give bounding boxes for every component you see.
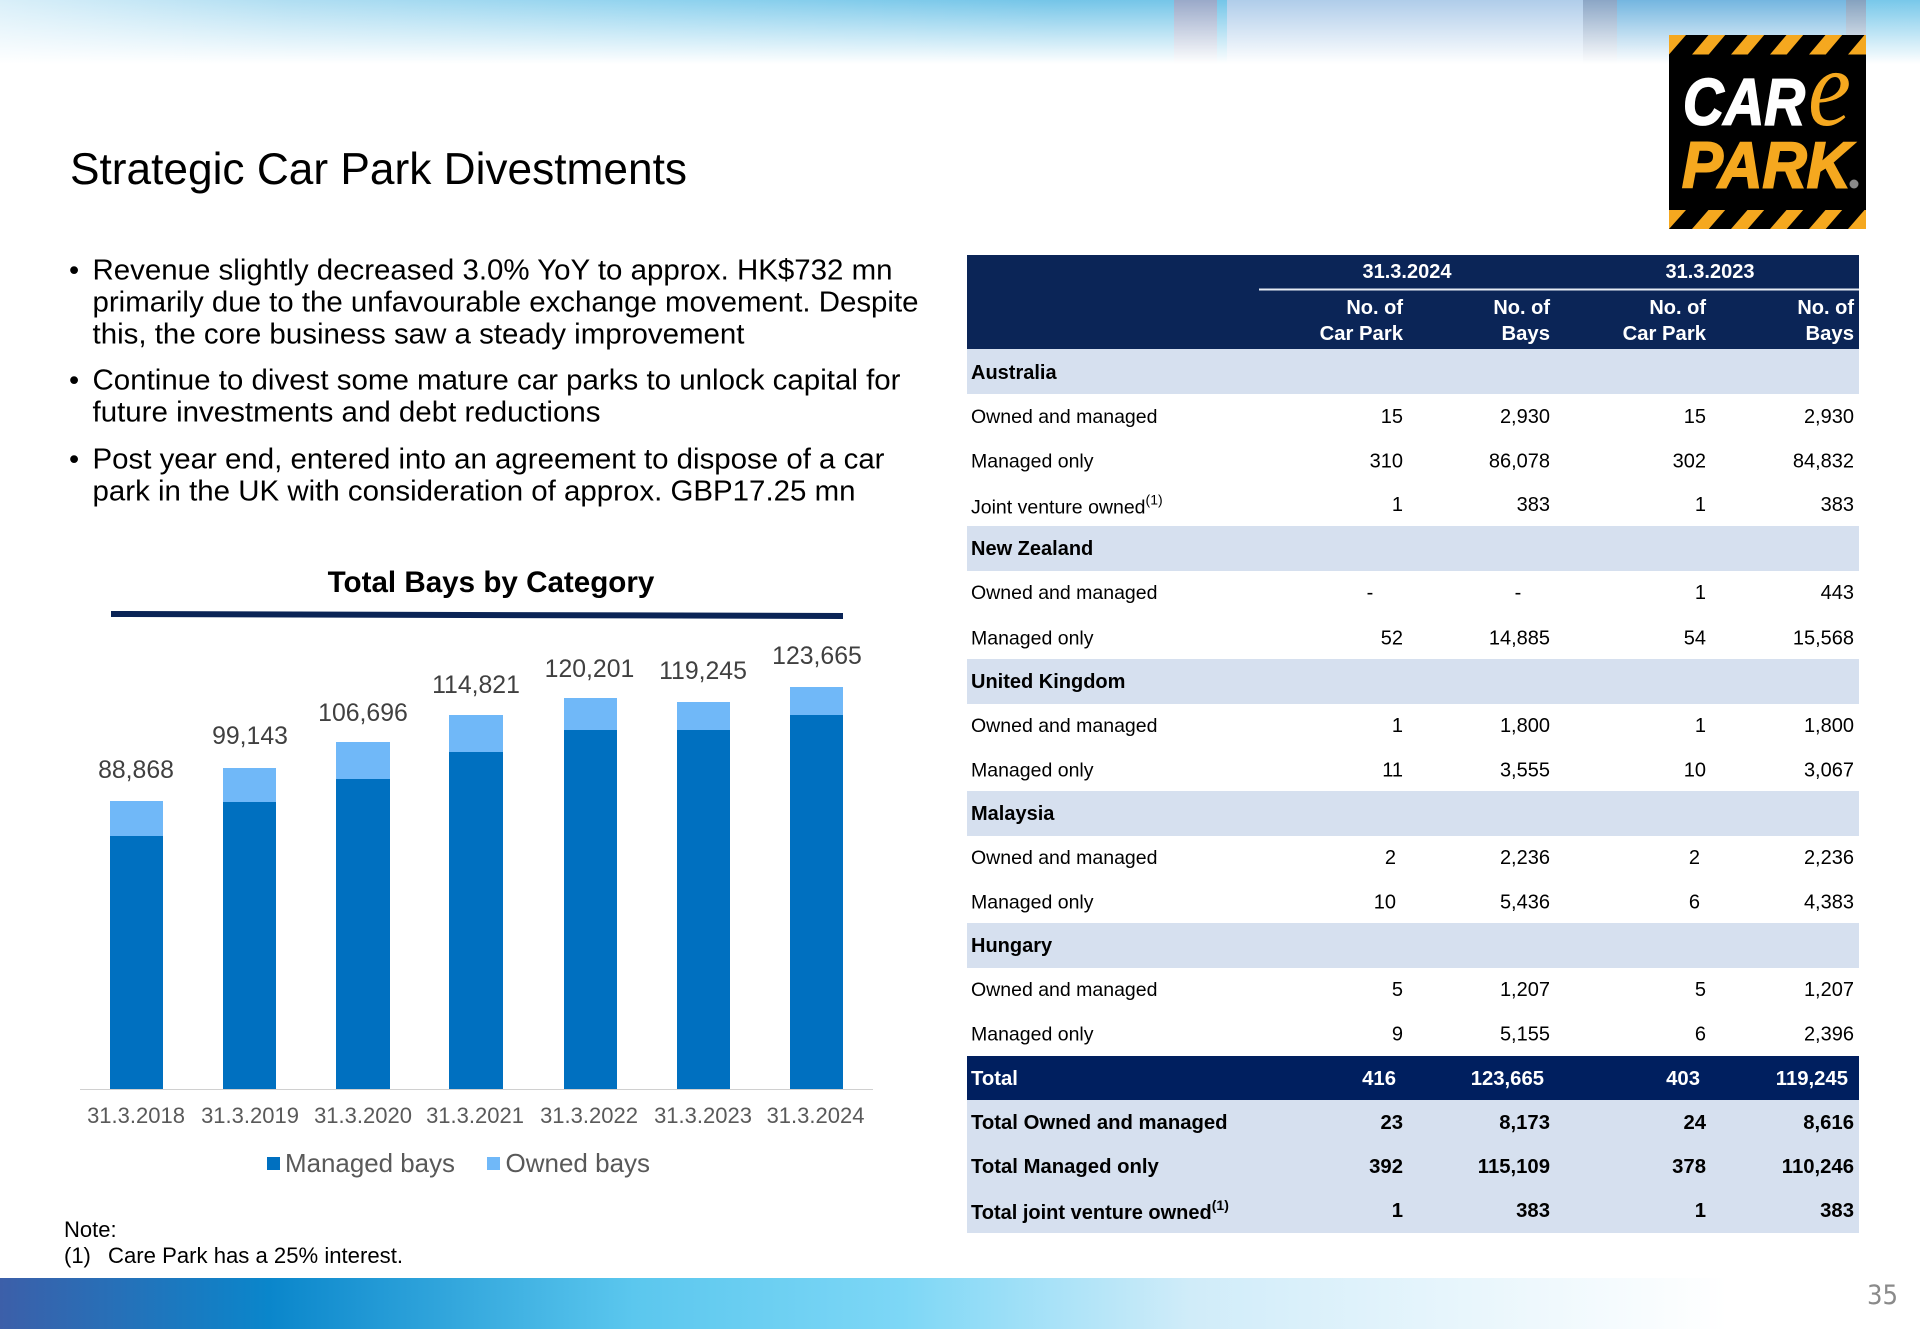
row: UK managed only: 3,067 bbox=[1804, 760, 1854, 782]
summary: total joint venture owned: (1) bbox=[1212, 1197, 1229, 1213]
row: UK owned and managed: 1,800 bbox=[1804, 715, 1854, 737]
section: Australia: Australia bbox=[971, 362, 1057, 384]
row: Australia owned and managed: Owned and managed bbox=[971, 406, 1157, 428]
row: UK owned and managed: 1,800 bbox=[1500, 715, 1550, 737]
summary: total joint venture owned: 1 bbox=[1392, 1200, 1403, 1222]
row: Australia joint venture: 1 bbox=[1695, 494, 1706, 516]
section: New Zealand: New Zealand bbox=[971, 538, 1093, 560]
row: New Zealand owned and managed: Owned and managed bbox=[971, 582, 1157, 604]
summary: total managed only: 110,246 bbox=[1782, 1156, 1854, 1178]
row: Hungary owned and managed: 5 bbox=[1695, 979, 1706, 1001]
row: Australia managed only: 302 bbox=[1673, 450, 1706, 472]
row: Malaysia owned and managed bbox=[971, 847, 1854, 869]
row: UK owned and managed: Owned and managed bbox=[971, 715, 1157, 737]
bar 31.3.2018: 88,868 bbox=[98, 757, 174, 784]
summary: total managed only: 392 bbox=[1369, 1156, 1403, 1178]
row: Hungary managed only: Managed only bbox=[971, 1024, 1094, 1046]
page number: 35 bbox=[1867, 1280, 1898, 1311]
row: New Zealand managed only: 52 bbox=[1381, 628, 1403, 650]
chart legend bbox=[267, 1148, 650, 1178]
table header: No. of bbox=[1797, 297, 1854, 319]
bullet 2: future investments and debt reductions bbox=[92, 396, 600, 428]
chart legend: Owned bays bbox=[506, 1148, 650, 1178]
bullet 2: Continue to divest some mature car parks to unlock capital for bbox=[92, 364, 901, 396]
table header bbox=[967, 255, 1859, 349]
row: Australia owned and managed bbox=[971, 406, 1854, 428]
bullet 2: • bbox=[69, 364, 79, 396]
row: Hungary owned and managed: 5 bbox=[1392, 979, 1403, 1001]
bar 31.3.2022: 120,201 bbox=[545, 656, 634, 683]
summary: total joint venture owned bbox=[971, 1197, 1854, 1224]
row: Australia managed only: 84,832 bbox=[1793, 450, 1854, 472]
bar 31.3.2019: 31.3.2019 bbox=[201, 1103, 299, 1128]
table header: 31.3.2024 bbox=[1363, 261, 1452, 283]
row: New Zealand owned and managed: 443 bbox=[1821, 582, 1854, 604]
row: Malaysia owned and managed: 2 bbox=[1385, 847, 1396, 869]
table header: Car Park bbox=[1623, 323, 1707, 345]
bar 31.3.2023 bbox=[654, 658, 752, 1128]
summary: total joint venture owned: Total joint venture owned bbox=[971, 1202, 1212, 1224]
row: Hungary owned and managed: 1,207 bbox=[1500, 979, 1550, 1001]
row: Australia joint venture: 383 bbox=[1821, 494, 1854, 516]
bullet 3: park in the UK with consideration of approx. GBP17.25 mn bbox=[92, 476, 856, 508]
bullet 1: • bbox=[69, 254, 79, 286]
bar 31.3.2021: 114,821 bbox=[432, 672, 520, 699]
total row: 119,245 bbox=[1776, 1068, 1848, 1090]
bar 31.3.2020: 31.3.2020 bbox=[314, 1103, 412, 1128]
section: Australia bbox=[967, 349, 1859, 394]
row: Malaysia owned and managed: 2 bbox=[1689, 847, 1700, 869]
row: New Zealand managed only bbox=[971, 628, 1854, 650]
bar 31.3.2018: 31.3.2018 bbox=[87, 1103, 185, 1128]
summary: total owned and managed: 24 bbox=[1683, 1112, 1707, 1134]
bullet 1: primarily due to the unfavourable exchange movement. Despite bbox=[92, 286, 918, 318]
row: Hungary managed only: 6 bbox=[1695, 1024, 1706, 1046]
table header: Bays bbox=[1502, 323, 1550, 345]
row: New Zealand managed only: 15,568 bbox=[1793, 628, 1854, 650]
section: Malaysia: Malaysia bbox=[971, 803, 1055, 825]
row: UK managed only: 3,555 bbox=[1500, 760, 1550, 782]
bar 31.3.2022 bbox=[540, 656, 638, 1128]
data table bbox=[967, 255, 1859, 1233]
table header: No. of bbox=[1493, 297, 1550, 319]
row: Hungary managed only bbox=[971, 1024, 1854, 1046]
footnote: Note: bbox=[64, 1217, 117, 1242]
row: New Zealand managed only: 54 bbox=[1684, 628, 1706, 650]
logo registered mark bbox=[1850, 180, 1858, 188]
row: Australia owned and managed: 15 bbox=[1684, 406, 1706, 428]
table header: Bays bbox=[1806, 323, 1854, 345]
row: Hungary owned and managed bbox=[971, 979, 1854, 1001]
row: Australia managed only bbox=[971, 450, 1854, 472]
row: New Zealand owned and managed: 1 bbox=[1695, 582, 1706, 604]
row: Malaysia managed only: 4,383 bbox=[1804, 892, 1854, 914]
bar 31.3.2022: 31.3.2022 bbox=[540, 1103, 638, 1128]
row: Australia joint venture: (1) bbox=[1146, 492, 1163, 508]
logo top hazard stripes bbox=[1669, 35, 1866, 54]
bar 31.3.2024: 31.3.2024 bbox=[767, 1103, 864, 1128]
row: Hungary managed only: 5,155 bbox=[1500, 1024, 1550, 1046]
row: Malaysia managed only: 6 bbox=[1689, 892, 1700, 914]
summary: total owned and managed: Total Owned and managed bbox=[971, 1112, 1228, 1134]
row: New Zealand managed only: Managed only bbox=[971, 628, 1094, 650]
table header: No. of bbox=[1346, 297, 1403, 319]
row: Malaysia managed only: Managed only bbox=[971, 892, 1094, 914]
row: Malaysia managed only: 5,436 bbox=[1500, 892, 1550, 914]
row: Malaysia owned and managed: 2,236 bbox=[1500, 847, 1550, 869]
summary: total joint venture owned: 383 bbox=[1516, 1200, 1550, 1222]
row: Australia owned and managed: 2,930 bbox=[1500, 406, 1550, 428]
logo wordmark e: e bbox=[1808, 27, 1851, 149]
bar 31.3.2021 bbox=[426, 672, 524, 1128]
row: Hungary managed only: 2,396 bbox=[1804, 1024, 1854, 1046]
logo wordmark PARK: PARK bbox=[1682, 128, 1855, 202]
total row: 416 bbox=[1362, 1068, 1396, 1090]
summary: total joint venture owned: 383 bbox=[1820, 1200, 1854, 1222]
row: Australia joint venture: 1 bbox=[1392, 494, 1403, 516]
section: Hungary bbox=[967, 923, 1859, 968]
logo wordmark CAR: CAR bbox=[1683, 64, 1805, 138]
row: Hungary owned and managed: Owned and managed bbox=[971, 979, 1157, 1001]
row: Australia joint venture: 383 bbox=[1517, 494, 1550, 516]
row: UK managed only: Managed only bbox=[971, 760, 1094, 782]
section: Hungary: Hungary bbox=[971, 935, 1053, 957]
summary rows bbox=[967, 1100, 1859, 1233]
row: New Zealand managed only: 14,885 bbox=[1489, 628, 1550, 650]
total row: 403 bbox=[1666, 1068, 1700, 1090]
bullet 1: this, the core business saw a steady improvement bbox=[92, 318, 744, 350]
row: Australia joint venture bbox=[971, 492, 1854, 518]
row: Malaysia managed only bbox=[971, 892, 1854, 914]
row: Australia owned and managed: 2,930 bbox=[1804, 406, 1854, 428]
summary: total owned and managed: 8,173 bbox=[1499, 1112, 1550, 1134]
bullet list bbox=[69, 254, 918, 508]
row: UK managed only: 10 bbox=[1684, 760, 1706, 782]
row: Malaysia owned and managed: 2,236 bbox=[1804, 847, 1854, 869]
total row bbox=[967, 1056, 1859, 1100]
row: UK owned and managed: 1 bbox=[1695, 715, 1706, 737]
row: Hungary owned and managed: 1,207 bbox=[1804, 979, 1854, 1001]
bullet 3 bbox=[69, 444, 885, 508]
footnote bbox=[64, 1217, 403, 1268]
total row: 123,665 bbox=[1471, 1068, 1544, 1090]
bullet 3: Post year end, entered into an agreement to dispose of a car bbox=[92, 444, 885, 476]
summary: total managed only: 115,109 bbox=[1478, 1156, 1550, 1178]
row: New Zealand owned and managed: - bbox=[1367, 582, 1373, 604]
bar 31.3.2020 bbox=[314, 700, 412, 1128]
row: New Zealand owned and managed bbox=[971, 582, 1854, 604]
bar 31.3.2019 bbox=[201, 723, 299, 1128]
row: Malaysia managed only: 10 bbox=[1374, 892, 1396, 914]
summary: total owned and managed: 8,616 bbox=[1803, 1112, 1854, 1134]
bar 31.3.2021: 31.3.2021 bbox=[426, 1103, 524, 1128]
table header: No. of bbox=[1649, 297, 1706, 319]
logo: Care Park bbox=[1669, 27, 1866, 229]
row: Australia joint venture: Joint venture owned bbox=[971, 496, 1146, 518]
bar 31.3.2019: 99,143 bbox=[212, 723, 288, 750]
total row: Total bbox=[971, 1068, 1018, 1090]
chart heading: Total Bays by Category bbox=[328, 566, 655, 599]
summary: total managed only bbox=[971, 1156, 1854, 1178]
row: UK owned and managed bbox=[971, 715, 1854, 737]
summary: total owned and managed: 23 bbox=[1380, 1112, 1403, 1134]
row: New Zealand owned and managed: - bbox=[1515, 582, 1521, 604]
table header: 31.3.2023 bbox=[1666, 261, 1754, 283]
bar 31.3.2020: 106,696 bbox=[318, 700, 408, 727]
row: Australia owned and managed: 15 bbox=[1381, 406, 1403, 428]
footnote: (1) bbox=[64, 1243, 91, 1268]
row: Hungary managed only: 9 bbox=[1392, 1024, 1403, 1046]
row: UK owned and managed: 1 bbox=[1392, 715, 1403, 737]
row: Australia managed only: 310 bbox=[1370, 450, 1403, 472]
bullet 1 bbox=[69, 254, 918, 350]
logo bottom hazard stripes bbox=[1669, 210, 1866, 229]
bar 31.3.2024 bbox=[767, 643, 864, 1128]
row: Australia managed only: 86,078 bbox=[1489, 450, 1550, 472]
chart heading rule bbox=[111, 611, 843, 619]
row: Australia managed only: Managed only bbox=[971, 450, 1094, 472]
summary: total owned and managed bbox=[971, 1112, 1854, 1134]
row: UK managed only: 11 bbox=[1382, 760, 1403, 782]
bullet 2 bbox=[69, 364, 901, 428]
bullet 3: • bbox=[69, 444, 79, 476]
footnote: Care Park has a 25% interest. bbox=[108, 1243, 403, 1268]
summary: total managed only: Total Managed only bbox=[971, 1156, 1160, 1178]
section: Malaysia bbox=[967, 791, 1859, 836]
bullet 1: Revenue slightly decreased 3.0% YoY to approx. HK$732 mn bbox=[92, 254, 892, 286]
bar 31.3.2023: 31.3.2023 bbox=[654, 1103, 752, 1128]
top gradient banner bbox=[0, 0, 1920, 64]
stacked bar chart: total bays bbox=[80, 643, 873, 1128]
bar 31.3.2023: 119,245 bbox=[659, 658, 747, 685]
summary: total managed only: 378 bbox=[1672, 1156, 1706, 1178]
row: UK managed only bbox=[971, 760, 1854, 782]
section: United Kingdom: United Kingdom bbox=[971, 671, 1125, 693]
title: Strategic Car Park Divestments bbox=[70, 145, 687, 194]
section: New Zealand bbox=[967, 526, 1859, 571]
bar 31.3.2024: 123,665 bbox=[772, 643, 862, 670]
table header: Car Park bbox=[1320, 323, 1404, 345]
bar 31.3.2018 bbox=[87, 757, 185, 1128]
section: United Kingdom bbox=[967, 659, 1859, 704]
row: Malaysia owned and managed: Owned and managed bbox=[971, 847, 1157, 869]
chart legend: Managed bays bbox=[285, 1148, 455, 1178]
bottom gradient band bbox=[0, 1278, 1920, 1329]
summary: total joint venture owned: 1 bbox=[1695, 1200, 1706, 1222]
